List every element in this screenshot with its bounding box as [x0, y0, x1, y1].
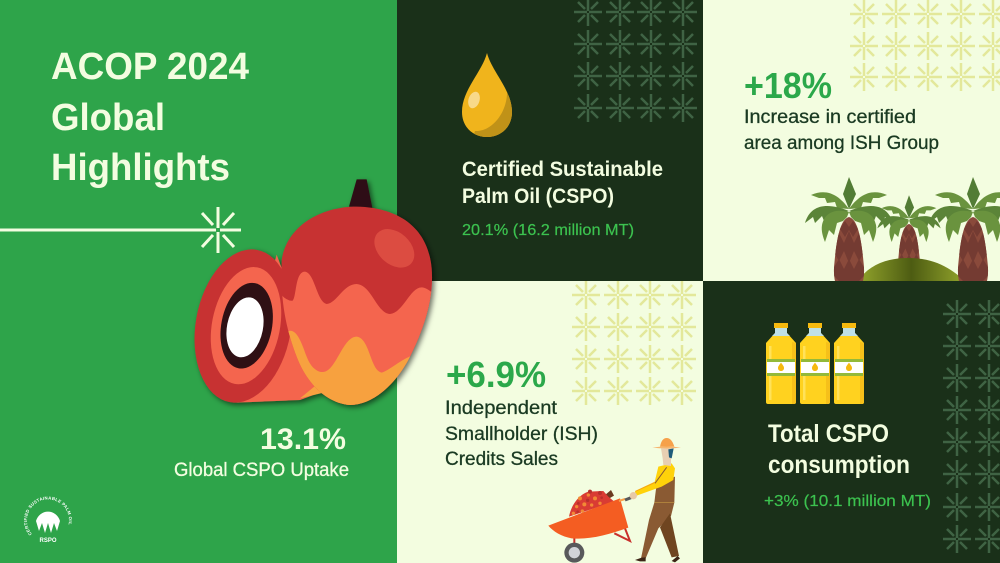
text: consumption: consumption	[768, 451, 910, 479]
panel: green highlights	[0, 0, 397, 563]
text: certified area: area among ISH Group	[744, 132, 939, 154]
panel: CSPO consumption	[703, 281, 1000, 563]
illustration: oil bottles	[766, 323, 864, 404]
illustration: palm trees	[805, 177, 1000, 281]
logo: RSPO: CERTIFIED SUSTAINABLE PALM OIL	[24, 496, 72, 536]
text: CSPO: 20.1% (16.2 million MT)	[462, 222, 634, 239]
title rule with star	[0, 207, 241, 253]
text: consumption: Total CSPO	[768, 420, 889, 448]
panel: certified area	[703, 0, 1000, 281]
text: certified area: Increase in certified	[744, 106, 916, 128]
logo: RSPO: RSPO	[39, 538, 57, 544]
text: CSPO: Palm Oil (CSPO)	[462, 185, 614, 208]
text: ISH credits: Independent	[445, 397, 558, 419]
title: Global	[51, 97, 165, 139]
title: Highlights	[51, 147, 230, 189]
title	[51, 46, 249, 189]
text: ISH credits	[445, 354, 598, 470]
icon: oil drop	[462, 53, 512, 137]
text: ISH credits: Smallholder (ISH)	[445, 423, 598, 445]
text: ISH credits: Credits Sales	[445, 448, 558, 470]
text: consumption	[764, 420, 931, 510]
stat: global uptake: Global CSPO Uptake	[174, 460, 349, 481]
illustration: farmer	[625, 438, 681, 562]
text: ISH credits: +6.9%	[446, 354, 546, 395]
title: ACOP 2024	[51, 46, 249, 88]
panel: ISH credits	[397, 281, 703, 563]
text: consumption: +3% (10.1 million MT)	[764, 493, 931, 510]
icon: palm fruit	[183, 179, 437, 410]
text: certified area: +18%	[744, 65, 832, 106]
text: CSPO: Certified Sustainable	[462, 158, 663, 181]
illustration: wheelbarrow	[548, 490, 630, 563]
stat: global uptake: 13.1%	[260, 423, 346, 456]
text: CSPO	[462, 158, 663, 239]
panel: CSPO	[397, 0, 703, 281]
stat: global uptake	[174, 423, 349, 481]
text: certified area	[744, 65, 939, 154]
